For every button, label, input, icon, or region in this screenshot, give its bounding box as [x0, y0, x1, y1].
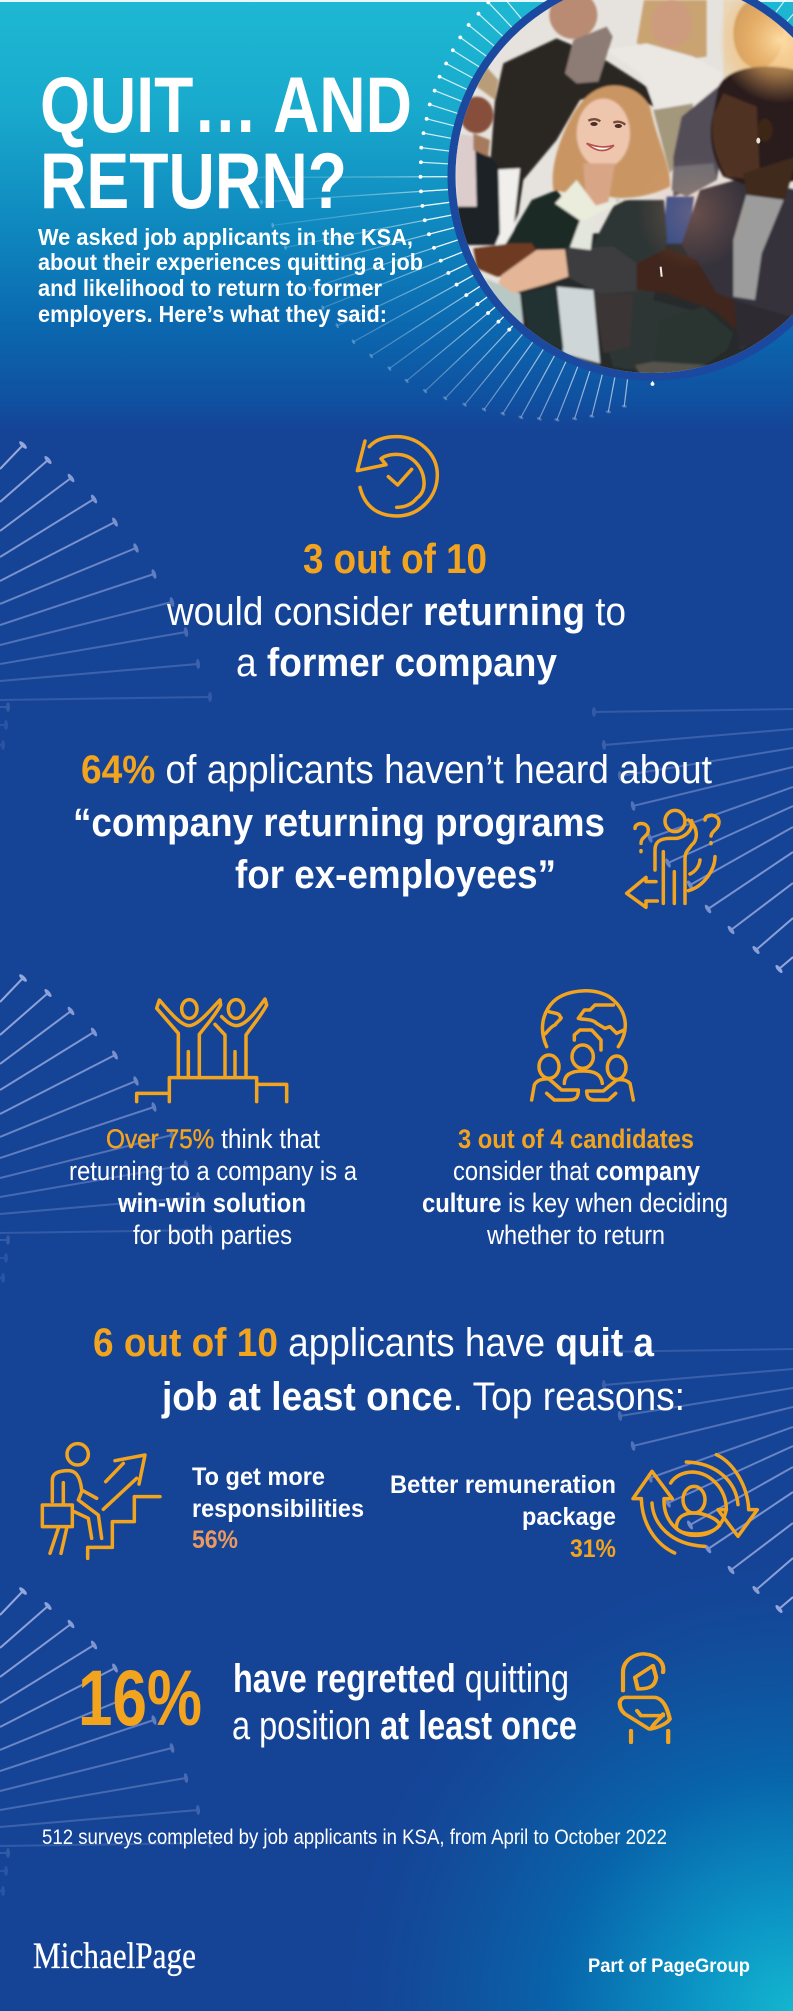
- stat: 3 out of 4 candidates: culture is key when deciding: [422, 1188, 728, 1218]
- stat: 64% have not heard about programs: for ex-employees”: [235, 853, 556, 897]
- reason: more responsibilities: 56%: [192, 1526, 238, 1554]
- stat: 64% have not heard about programs: “company returning programs: [73, 801, 605, 845]
- stat: 3 out of 10: [166, 535, 626, 685]
- stat: 3 out of 10: 3 out of 10: [303, 535, 487, 582]
- stat: over 75% win-win solution: win-win solution: [117, 1188, 306, 1218]
- stat: 16% regretted quitting: [78, 1653, 577, 1748]
- stat: 16% regretted quitting: have regretted quitting: [233, 1657, 569, 1701]
- sunburst rays around the photo: [251, 0, 793, 420]
- reason: more responsibilities: responsibilities: [192, 1495, 364, 1523]
- reason: better remuneration: [390, 1471, 616, 1563]
- stat: 3 out of 4 candidates: whether to return: [486, 1220, 665, 1250]
- heading: 6 out of 10 top reasons: [93, 1321, 685, 1419]
- reason: better remuneration: 31%: [570, 1535, 616, 1563]
- icon: questioning figure with arrow: [627, 810, 719, 907]
- tagline: Part of PageGroup: Part of PageGroup: [588, 1956, 750, 1977]
- stat: 16% regretted quitting: 16%: [78, 1653, 202, 1742]
- stat: 16% regretted quitting: a position at least once: [232, 1704, 577, 1748]
- icon: two people celebrating on podium: [137, 999, 287, 1102]
- reason: more responsibilities: To get more: [192, 1463, 325, 1491]
- intro text: employers. Here’s what they said:: [38, 301, 387, 327]
- icon: clock with return arrow: [357, 437, 437, 516]
- intro text: We asked job applicants in the KSA,: [38, 224, 413, 250]
- stat: 3 out of 10: would consider returning to: [166, 590, 626, 634]
- title: RETURN?: [40, 136, 347, 225]
- icon: person climbing stairs: [42, 1444, 160, 1558]
- intro text: [38, 224, 423, 327]
- stat: 64% have not heard about programs: 64% of applicants haven’t heard about: [81, 748, 712, 792]
- stat: 3 out of 4 candidates: [422, 1124, 728, 1250]
- title: [40, 60, 412, 225]
- icon: globe and people: [532, 991, 633, 1100]
- icon: circular arrows around person: [633, 1455, 757, 1553]
- stat: 3 out of 10: a former company: [236, 641, 558, 685]
- reason: more responsibilities: [192, 1463, 364, 1554]
- reason: better remuneration: Better remuneration: [390, 1471, 616, 1499]
- stat: 3 out of 4 candidates: 3 out of 4 candidates: [458, 1124, 694, 1154]
- logo: Michael Page: MichaelPage: [33, 1936, 196, 1977]
- stat: 3 out of 4 candidates: consider that company: [453, 1156, 700, 1186]
- stat: over 75% win-win solution: [69, 1124, 358, 1250]
- reason: better remuneration: package: [522, 1503, 616, 1531]
- title: QUIT… AND: [40, 60, 412, 149]
- heading: 6 out of 10 top reasons: job at least once. Top reasons:: [161, 1375, 685, 1419]
- intro text: and likelihood to return to former: [38, 275, 382, 301]
- icon: woman with crossed arms: [620, 1654, 670, 1742]
- stat: 64% have not heard about programs: [73, 748, 712, 897]
- intro text: about their experiences quitting a job: [38, 249, 423, 275]
- decorative ray bursts on the body: [0, 445, 793, 1891]
- stat: over 75% win-win solution: returning to a company is a: [69, 1156, 358, 1186]
- stat: over 75% win-win solution: for both parties: [133, 1220, 292, 1250]
- footnote: survey source: 512 surveys completed by job applicants in KSA, from April to October 2022: [42, 1826, 667, 1849]
- stat: over 75% win-win solution: Over 75% think that: [106, 1124, 320, 1154]
- photo: colleagues shaking hands in circular frame: [440, 0, 793, 393]
- heading: 6 out of 10 top reasons: 6 out of 10 applicants have quit a: [93, 1321, 655, 1365]
